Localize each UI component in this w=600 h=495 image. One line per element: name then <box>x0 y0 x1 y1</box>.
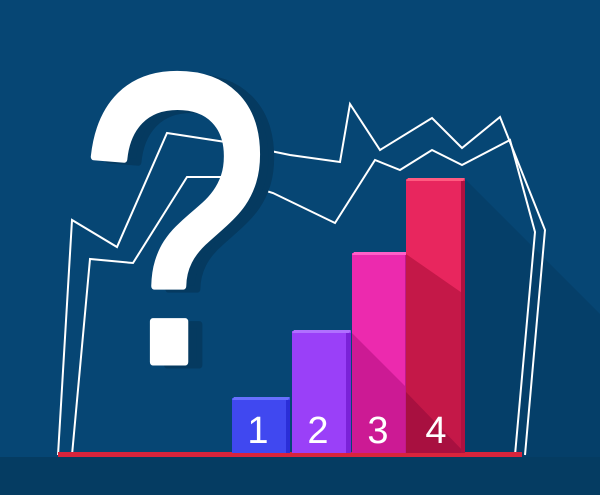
question mark with shadow: ? <box>94 0 284 453</box>
red base line <box>58 452 522 457</box>
bar 3: 3 <box>367 410 389 452</box>
bottom strip <box>0 457 600 495</box>
long shadow of bars <box>290 179 600 495</box>
question mark with shadow: ? <box>80 0 270 450</box>
bar chart <box>232 178 465 453</box>
bar 1 <box>232 397 290 453</box>
bar 2 <box>292 330 351 453</box>
bar 4 <box>406 178 465 453</box>
bar 4: 4 <box>425 410 447 452</box>
bar 2: 2 <box>307 410 329 452</box>
white polyline lines <box>58 104 545 455</box>
bar 3 <box>352 252 411 453</box>
bar 1: 1 <box>247 410 269 452</box>
